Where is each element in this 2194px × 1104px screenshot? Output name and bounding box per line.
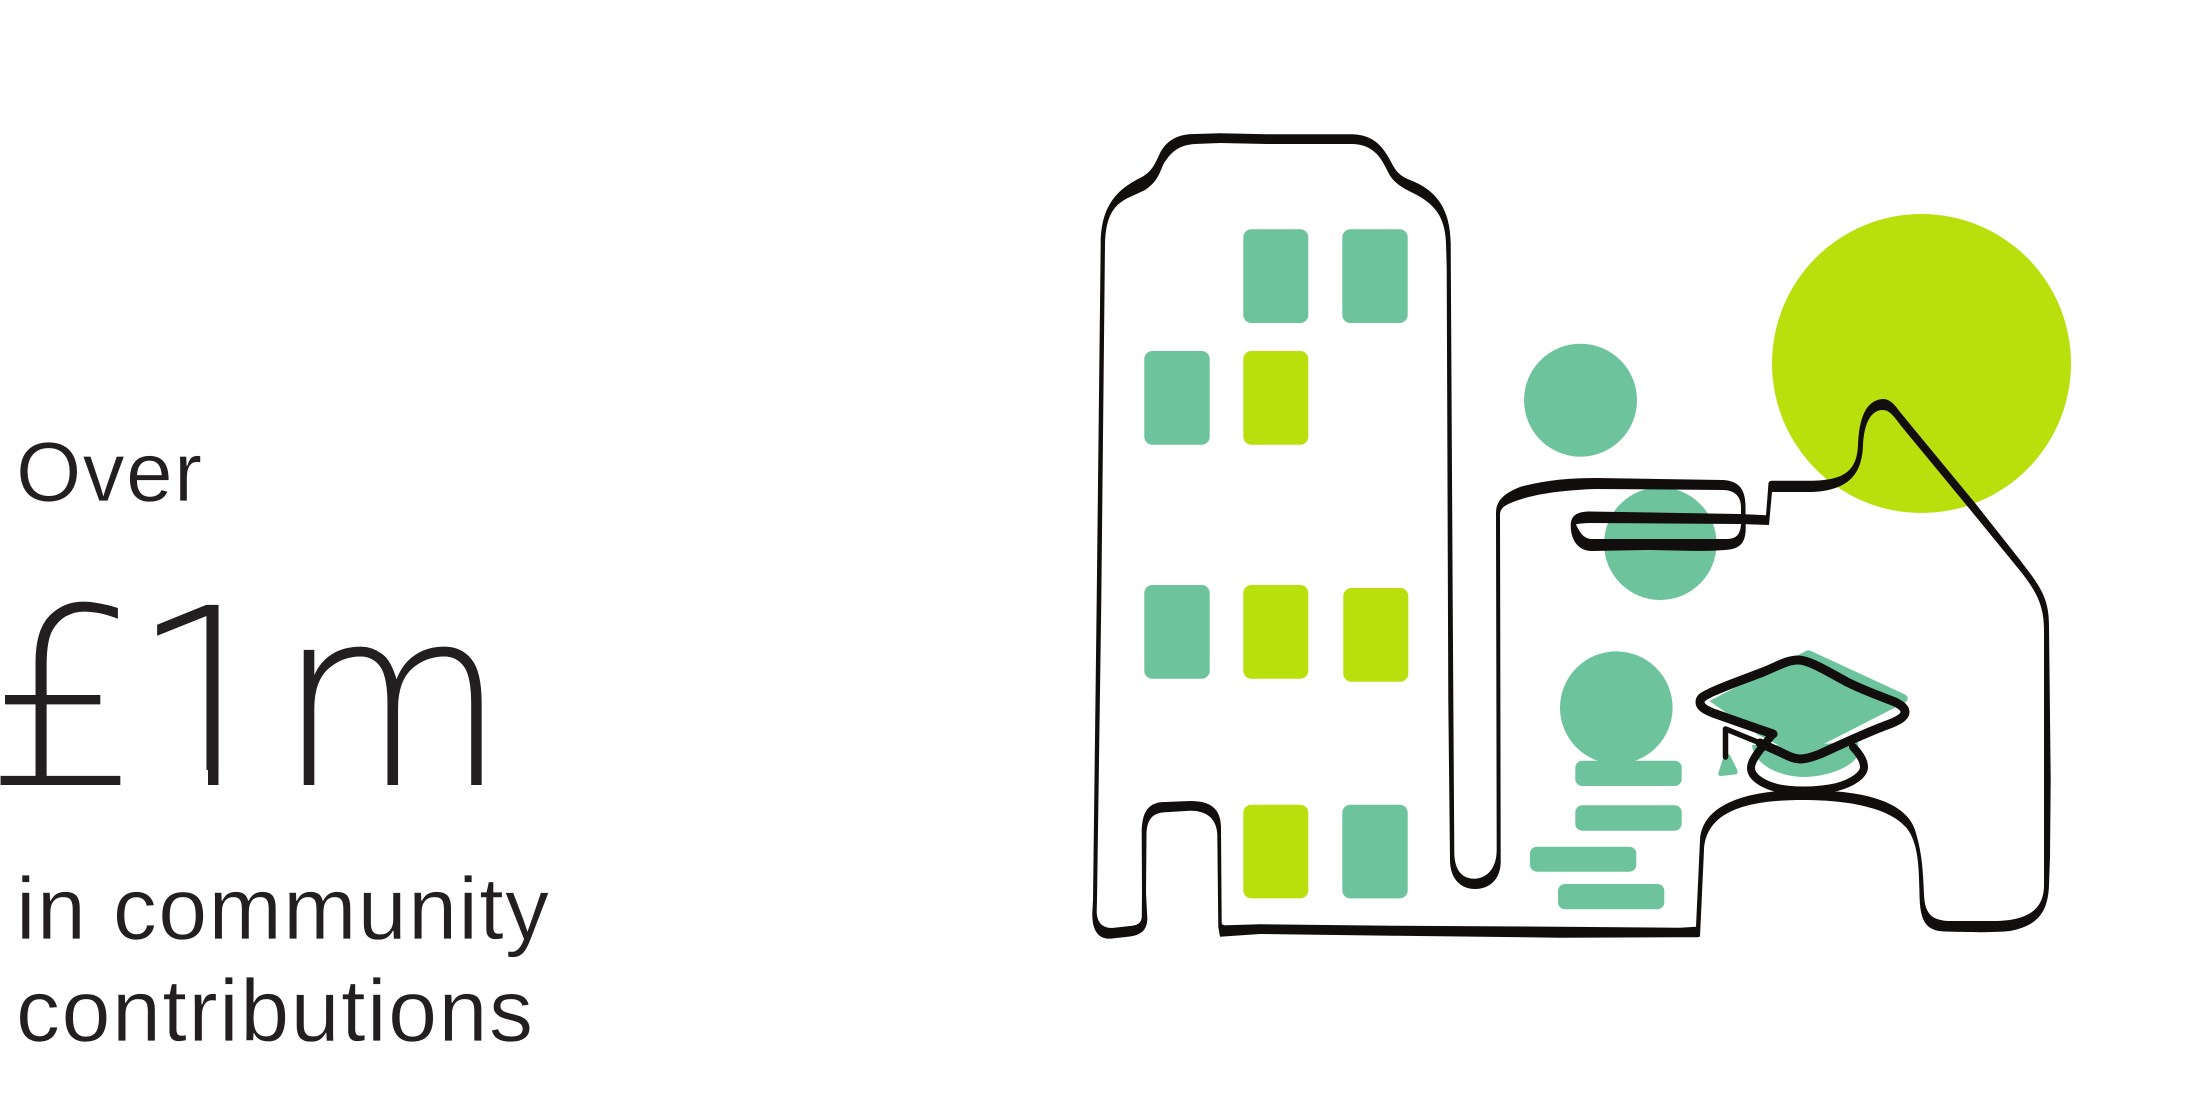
text block: statistic [0, 425, 549, 1060]
text: in community: in community [16, 859, 549, 958]
lime sun circle [1772, 214, 2071, 513]
graduation cap outline [1700, 660, 1905, 790]
windows [1144, 229, 1408, 898]
green circles [1524, 344, 1717, 764]
building outline [1092, 133, 2051, 939]
illustration: school building with graduation cap [1092, 133, 2071, 939]
text: £1m figure [0, 556, 507, 844]
graduation cap fill [1709, 650, 1908, 777]
text: Over: Over [16, 425, 202, 519]
text: contributions: contributions [16, 961, 533, 1060]
text: £1m figure: m [277, 556, 507, 843]
green bars [1530, 761, 1682, 909]
